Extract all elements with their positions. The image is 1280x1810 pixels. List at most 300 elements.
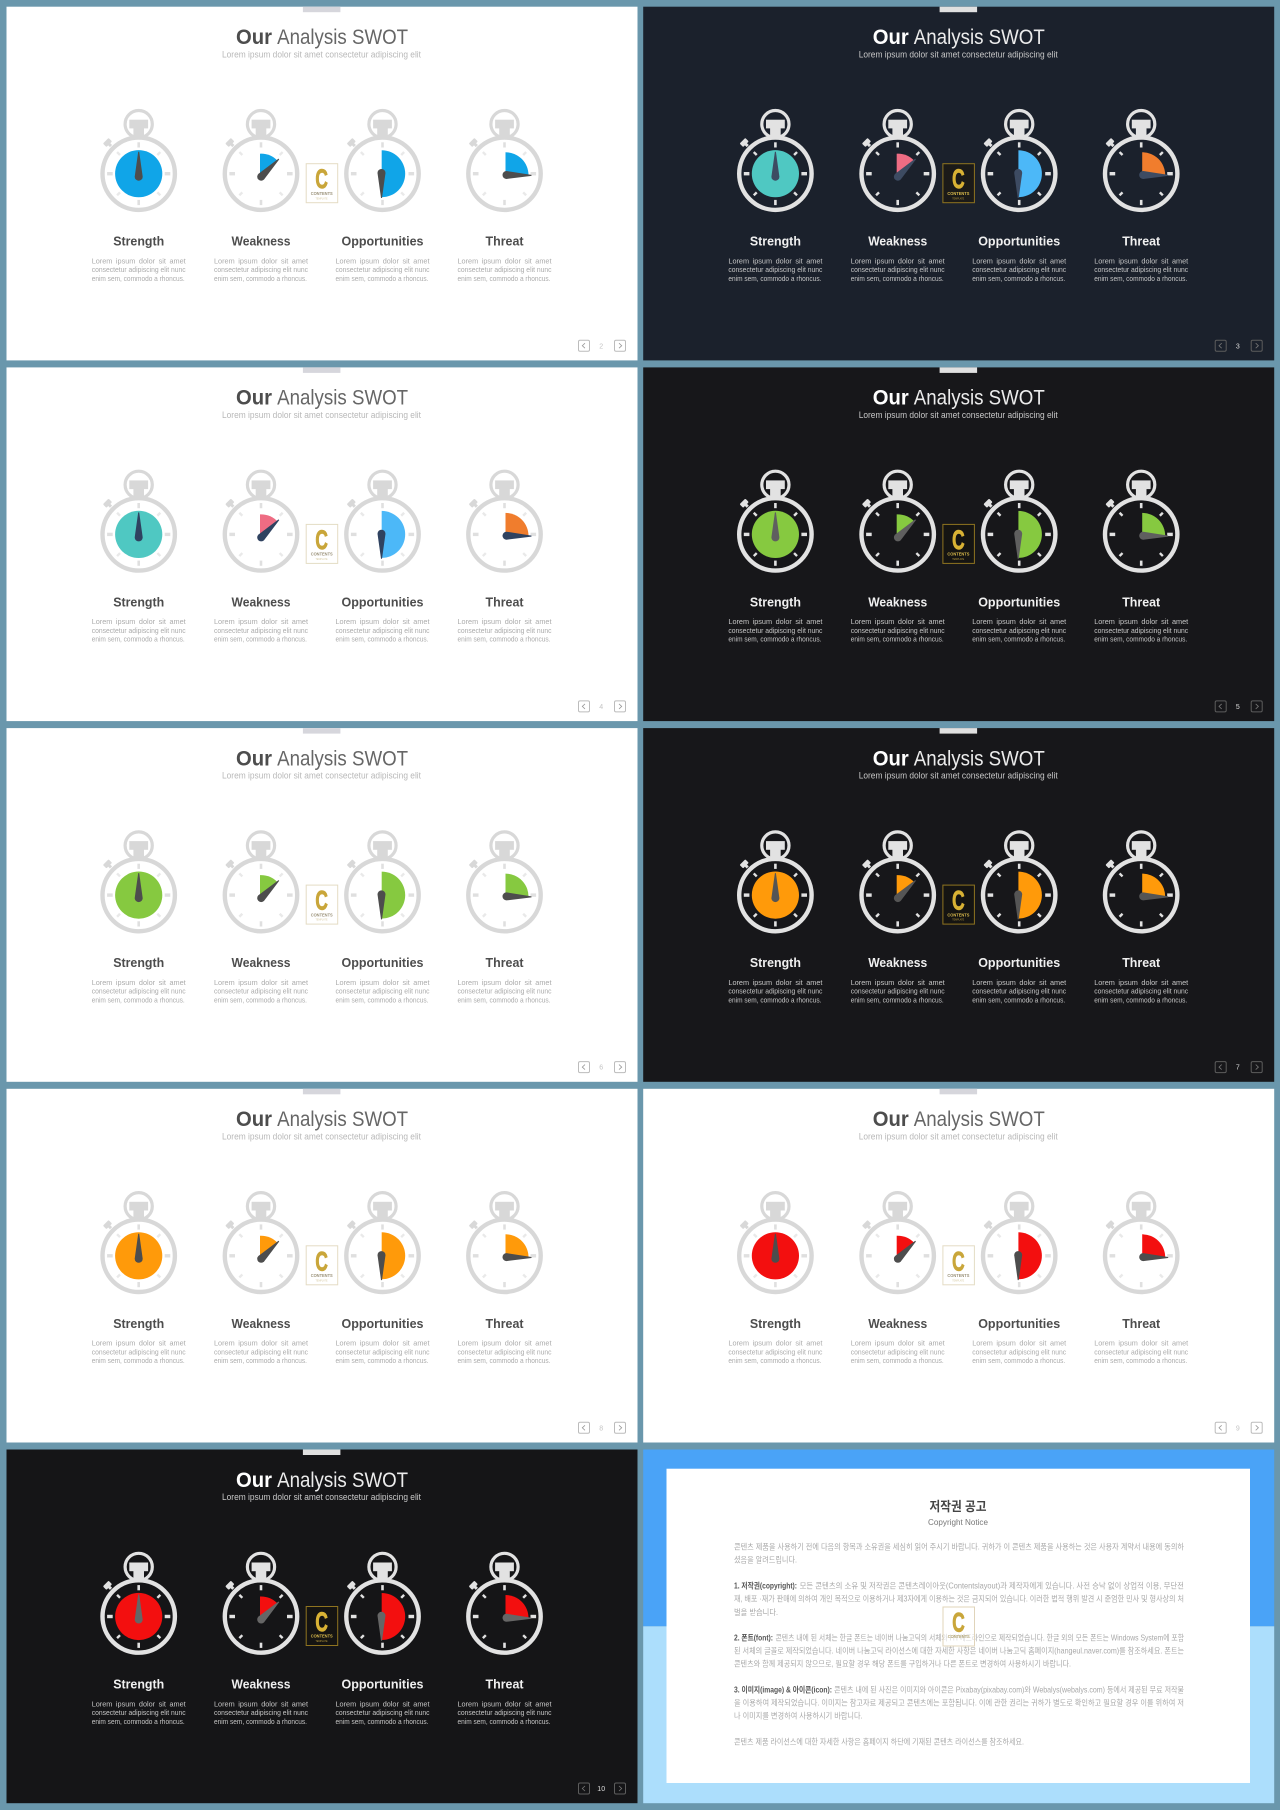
stopwatch: Threat: [1105, 1193, 1177, 1292]
title: Analysis SWOT: [914, 387, 1045, 410]
text: Threat: Lorem ipsum dolor sit amet: [458, 617, 552, 626]
text: Strength: Strength: [750, 595, 801, 609]
text: Strength: Strength: [113, 235, 164, 249]
text: Opportunities: consectetur adipiscing elit nunc: [972, 265, 1067, 274]
title: Our: [236, 387, 272, 410]
text: Opportunities: Lorem ipsum dolor sit amet: [972, 978, 1066, 987]
copyright section 1: 벌을 받습니다.: [734, 1607, 778, 1617]
text: Opportunities: enim sem, commodo a rhoncus.: [972, 635, 1065, 644]
text: Threat: Lorem ipsum dolor sit amet: [458, 1699, 552, 1708]
text: Opportunities: consectetur adipiscing elit nunc: [972, 626, 1067, 635]
text: Threat: [458, 595, 552, 644]
text: Opportunities: enim sem, commodo a rhoncus.: [336, 995, 429, 1004]
pager: [1215, 1062, 1262, 1073]
copyright section 1: [734, 1580, 1184, 1617]
text: Weakness: Weakness: [868, 235, 927, 249]
title: [236, 747, 408, 770]
logo: TEMPLATE: [952, 196, 964, 200]
stopwatch: Weakness: [862, 110, 934, 210]
text: Opportunities: Opportunities: [978, 1317, 1060, 1331]
logo: [306, 885, 338, 924]
pager: [578, 1422, 626, 1433]
stopwatch: Strength: [102, 471, 175, 571]
text: Opportunities: Opportunities: [342, 235, 424, 249]
text: Strength: Strength: [113, 956, 164, 970]
copyright section 1: 모든 콘텐츠의 소유 및 저작권은 콘텐츠레이아웃(Contentslayout)과 제작자에게 있습니다. 사전 승낙 없이 상업적 이용, 무단전: [800, 1580, 1184, 1590]
text: Opportunities: enim sem, commodo a rhoncus.: [336, 274, 429, 283]
text: Strength: consectetur adipiscing elit nunc: [92, 626, 186, 635]
logo: C: [315, 886, 328, 916]
copyright heading: [928, 1499, 988, 1527]
text: Threat: [458, 956, 552, 1004]
text: Threat: consectetur adipiscing elit nunc: [458, 1708, 552, 1717]
text: Opportunities: Lorem ipsum dolor sit amet: [972, 617, 1066, 626]
text: Threat: [1094, 235, 1189, 283]
logo: [943, 164, 974, 203]
stopwatch: Opportunities: [983, 110, 1055, 210]
logo: TEMPLATE: [316, 1639, 328, 1643]
title: Analysis SWOT: [277, 747, 408, 770]
text: Threat: enim sem, commodo a rhoncus.: [458, 635, 551, 644]
title: [873, 747, 1045, 770]
panel: slide 10 black red: [6, 1450, 638, 1803]
logo: C: [315, 1246, 328, 1276]
copyright section 3: 을 이용하여 제작되었습니다. 이미지는 참고자료 제공되고 콘텐츠에는 포함됩니다. 이에 관한 권리는 귀하가 별도로 확인하고 필요할 경우 이를 위하여 저: [734, 1697, 1184, 1707]
copyright closing line: 콘텐츠 제품 라이선스에 대한 자세한 사항은 홈페이지 하단에 기재된 콘텐츠 라이선스를 참조하세요.: [734, 1736, 1024, 1746]
text: Strength: Lorem ipsum dolor sit amet: [92, 617, 186, 626]
text: Opportunities: Lorem ipsum dolor sit amet: [336, 978, 430, 987]
subtitle: Lorem ipsum dolor sit amet consectetur adipiscing elit: [222, 410, 421, 420]
text: Threat: Lorem ipsum dolor sit amet: [458, 978, 552, 987]
text: Weakness: [214, 1317, 308, 1365]
logo: [306, 164, 338, 203]
logo: CONTENTS: [947, 912, 969, 917]
stopwatch: Opportunities: [346, 1193, 419, 1292]
subtitle: Lorem ipsum dolor sit amet consectetur adipiscing elit: [859, 771, 1058, 781]
text: Weakness: consectetur adipiscing elit nunc: [214, 1347, 308, 1356]
text: Opportunities: consectetur adipiscing elit nunc: [336, 626, 430, 635]
pager: 7: [1236, 1065, 1240, 1072]
pager: 9: [1236, 1425, 1240, 1432]
text: Opportunities: enim sem, commodo a rhoncus.: [972, 1356, 1065, 1365]
logo: CONTENTS: [311, 191, 333, 196]
text: Weakness: Weakness: [868, 595, 927, 609]
text: Opportunities: [972, 956, 1067, 1004]
text: Strength: Lorem ipsum dolor sit amet: [728, 256, 822, 265]
logo: TEMPLATE: [316, 918, 328, 922]
text: Strength: [92, 1678, 186, 1726]
text: Opportunities: Opportunities: [978, 956, 1060, 970]
text: Threat: consectetur adipiscing elit nunc: [458, 1347, 552, 1356]
stopwatch: Strength: [102, 1553, 175, 1653]
stopwatch: Weakness: [862, 1193, 934, 1292]
text: Weakness: consectetur adipiscing elit nunc: [851, 265, 945, 274]
text: Opportunities: enim sem, commodo a rhoncus.: [336, 1356, 429, 1365]
logo: [306, 1606, 338, 1646]
title: Our: [236, 1469, 272, 1492]
logo: CONTENTS: [948, 1634, 970, 1639]
text: Threat: consectetur adipiscing elit nunc: [1094, 1347, 1189, 1356]
stopwatch: Weakness: [225, 1193, 297, 1292]
text: Strength: Lorem ipsum dolor sit amet: [728, 1339, 822, 1348]
text: Strength: Strength: [113, 595, 164, 609]
text: Threat: enim sem, commodo a rhoncus.: [458, 1356, 551, 1365]
text: Strength: enim sem, commodo a rhoncus.: [728, 274, 821, 283]
pager: [578, 1062, 626, 1073]
title: Our: [236, 747, 272, 770]
text: Weakness: Lorem ipsum dolor sit amet: [851, 617, 945, 626]
text: Opportunities: enim sem, commodo a rhoncus.: [336, 1717, 429, 1726]
text: Strength: [92, 1317, 186, 1365]
text: Weakness: Lorem ipsum dolor sit amet: [214, 256, 308, 265]
stopwatch: Opportunities: [346, 471, 419, 571]
stopwatch: Threat: [1105, 110, 1177, 210]
stopwatch: Strength: [102, 832, 175, 931]
text: Strength: [92, 956, 186, 1004]
text: Opportunities: [336, 235, 430, 283]
text: Weakness: Weakness: [232, 956, 291, 970]
text: Weakness: [851, 1317, 945, 1365]
logo: TEMPLATE: [316, 1278, 328, 1282]
text: Threat: consectetur adipiscing elit nunc: [1094, 626, 1189, 635]
text: Strength: [92, 595, 186, 644]
text: Strength: Strength: [113, 1678, 164, 1692]
logo: TEMPLATE: [952, 557, 964, 561]
stopwatch: Threat: [1105, 471, 1177, 571]
text: Weakness: enim sem, commodo a rhoncus.: [851, 274, 944, 283]
text: Weakness: enim sem, commodo a rhoncus.: [851, 635, 944, 644]
logo: [306, 524, 338, 563]
text: Strength: enim sem, commodo a rhoncus.: [728, 635, 821, 644]
title: Our: [873, 747, 909, 770]
logo: CONTENTS: [947, 552, 969, 557]
text: Threat: consectetur adipiscing elit nunc: [1094, 265, 1189, 274]
text: Strength: Lorem ipsum dolor sit amet: [92, 1339, 186, 1348]
title: [236, 1469, 408, 1492]
copyright section 3: 나 이미지를 변경하여 사용하시기 바랍니다.: [734, 1710, 863, 1720]
text: Opportunities: enim sem, commodo a rhoncus.: [336, 635, 429, 644]
subtitle: Lorem ipsum dolor sit amet consectetur adipiscing elit: [859, 49, 1058, 59]
title: Our: [873, 1108, 909, 1131]
title: Analysis SWOT: [277, 387, 408, 410]
text: Threat: Threat: [1122, 956, 1161, 970]
logo: TEMPLATE: [316, 196, 328, 200]
title: [873, 26, 1045, 49]
pager: [1215, 340, 1262, 351]
text: Opportunities: Lorem ipsum dolor sit amet: [336, 256, 430, 265]
text: Threat: Lorem ipsum dolor sit amet: [1094, 978, 1188, 987]
text: Weakness: [214, 235, 308, 283]
stopwatch: Strength: [739, 832, 812, 931]
stopwatch: Weakness: [862, 471, 934, 571]
text: Strength: enim sem, commodo a rhoncus.: [92, 1717, 185, 1726]
logo: CONTENTS: [311, 912, 333, 917]
text: Strength: Strength: [113, 1317, 164, 1331]
stopwatch: Opportunities: [346, 832, 419, 931]
title: Analysis SWOT: [914, 1108, 1045, 1131]
logo: CONTENTS: [311, 1634, 333, 1639]
stopwatch: Threat: [468, 471, 541, 571]
text: Strength: [728, 1317, 823, 1365]
text: Weakness: Lorem ipsum dolor sit amet: [214, 1699, 308, 1708]
logo: C: [315, 525, 328, 555]
text: Opportunities: consectetur adipiscing elit nunc: [336, 265, 430, 274]
text: Threat: [1094, 595, 1189, 644]
title: [873, 387, 1045, 410]
stopwatch: Weakness: [225, 1553, 297, 1653]
text: Opportunities: enim sem, commodo a rhoncus.: [972, 995, 1065, 1004]
copyright intro: [734, 1542, 1184, 1564]
text: Threat: consectetur adipiscing elit nunc: [458, 626, 552, 635]
stopwatch: Weakness: [225, 832, 297, 931]
copyright section 2: 된 서체의 글꼴로 제작되었습니다. 네이버 나눔고딕 라이선스에 대한 자세한 사항은 네이버 나눔고딕 홈페이지(hangeul.naver.com)를 참조하세요. 폰트는: [734, 1646, 1184, 1656]
panel: slide 8 white orange: [6, 1089, 638, 1442]
text: Strength: consectetur adipiscing elit nunc: [92, 1708, 186, 1717]
subtitle: Lorem ipsum dolor sit amet consectetur adipiscing elit: [222, 49, 421, 59]
title: Our: [873, 387, 909, 410]
text: Threat: [1094, 1317, 1189, 1365]
text: Opportunities: Opportunities: [342, 595, 424, 609]
logo: [943, 524, 974, 563]
logo: C: [952, 1608, 965, 1638]
text: Threat: enim sem, commodo a rhoncus.: [1094, 995, 1187, 1004]
text: Strength: Strength: [750, 956, 801, 970]
text: Opportunities: Opportunities: [342, 956, 424, 970]
panel: slide 4 white multicolour: [6, 367, 638, 721]
text: Weakness: [851, 235, 945, 283]
copyright section 3: [734, 1684, 1184, 1720]
pager: [578, 701, 626, 712]
text: Opportunities: Lorem ipsum dolor sit amet: [972, 1339, 1066, 1348]
text: Strength: Lorem ipsum dolor sit amet: [92, 978, 186, 987]
text: Weakness: Lorem ipsum dolor sit amet: [851, 978, 945, 987]
panel: slide 5 black green: [643, 367, 1274, 721]
text: Opportunities: Lorem ipsum dolor sit amet: [336, 617, 430, 626]
stopwatch: Weakness: [862, 832, 934, 931]
logo: [943, 885, 974, 924]
text: Strength: Lorem ipsum dolor sit amet: [92, 1699, 186, 1708]
text: Weakness: Weakness: [232, 1678, 291, 1692]
text: Opportunities: consectetur adipiscing elit nunc: [336, 1347, 430, 1356]
logo: [306, 1246, 338, 1285]
pager: 2: [599, 343, 603, 350]
text: Weakness: enim sem, commodo a rhoncus.: [214, 274, 307, 283]
stopwatch: Opportunities: [346, 110, 419, 210]
text: Weakness: consectetur adipiscing elit nunc: [214, 1708, 308, 1717]
pager: 4: [599, 704, 603, 711]
pager: [1215, 701, 1262, 712]
panel: slide 6 white green: [6, 728, 638, 1082]
text: Threat: Threat: [486, 1317, 524, 1331]
text: Weakness: consectetur adipiscing elit nunc: [214, 265, 308, 274]
copyright section 1: 재, 배포 ·재가 판매에 의하여 개인 목적으로 이용하거나 제3자에게 이용하는 것은 금지되어 있습니다. 이러한 법적 행위 발견 시 준엄한 민사 및 형사상의 처: [734, 1593, 1184, 1603]
stopwatch: Weakness: [225, 471, 297, 571]
text: Weakness: Lorem ipsum dolor sit amet: [214, 978, 308, 987]
text: Strength: consectetur adipiscing elit nunc: [92, 987, 186, 996]
text: Opportunities: consectetur adipiscing elit nunc: [972, 987, 1067, 996]
text: Opportunities: Lorem ipsum dolor sit amet: [336, 1339, 430, 1348]
title: Analysis SWOT: [914, 747, 1045, 770]
text: Threat: [1094, 956, 1189, 1004]
text: Strength: Lorem ipsum dolor sit amet: [728, 617, 822, 626]
text: Weakness: Lorem ipsum dolor sit amet: [214, 617, 308, 626]
text: Strength: [728, 595, 823, 644]
text: Opportunities: consectetur adipiscing elit nunc: [972, 1347, 1067, 1356]
text: Weakness: Weakness: [232, 235, 291, 249]
text: Strength: [92, 235, 186, 283]
text: Strength: Strength: [750, 235, 801, 249]
text: Weakness: Lorem ipsum dolor sit amet: [851, 1339, 945, 1348]
text: Threat: enim sem, commodo a rhoncus.: [1094, 635, 1187, 644]
text: Threat: enim sem, commodo a rhoncus.: [458, 995, 551, 1004]
title: Analysis SWOT: [277, 1108, 408, 1131]
title: Analysis SWOT: [277, 1469, 408, 1492]
text: Threat: enim sem, commodo a rhoncus.: [458, 274, 551, 283]
text: Opportunities: Opportunities: [978, 235, 1060, 249]
text: Threat: Threat: [486, 595, 524, 609]
panel: slide 2 white blue: [6, 7, 638, 360]
title: [236, 26, 408, 49]
text: Strength: Lorem ipsum dolor sit amet: [92, 256, 186, 265]
copyright intro: 셨음을 알려드립니다.: [734, 1554, 797, 1564]
text: Weakness: enim sem, commodo a rhoncus.: [851, 995, 944, 1004]
title: [236, 387, 408, 410]
logo: C: [315, 164, 328, 194]
text: Opportunities: Opportunities: [342, 1317, 424, 1331]
copyright section 2: 콘텐츠와 함께 제공되지 않으므로, 필요할 경우 해당 폰트를 구입하거나 다른 폰트로 변경하여 사용하시기 바랍니다.: [734, 1658, 1071, 1668]
text: Strength: consectetur adipiscing elit nunc: [728, 987, 823, 996]
text: Threat: [458, 235, 552, 283]
text: Strength: consectetur adipiscing elit nunc: [728, 626, 823, 635]
text: Weakness: Weakness: [232, 1317, 291, 1331]
text: Threat: Lorem ipsum dolor sit amet: [1094, 256, 1188, 265]
logo: [943, 1607, 974, 1646]
text: Weakness: enim sem, commodo a rhoncus.: [214, 1717, 307, 1726]
text: Threat: Threat: [486, 1678, 524, 1692]
title: Analysis SWOT: [277, 26, 408, 49]
text: Weakness: Lorem ipsum dolor sit amet: [214, 1339, 308, 1348]
pager: [1215, 1422, 1262, 1433]
stopwatch: Opportunities: [346, 1553, 419, 1653]
text: Weakness: [851, 595, 945, 644]
logo: [943, 1246, 974, 1285]
stopwatch: Strength: [739, 471, 812, 571]
text: Threat: Lorem ipsum dolor sit amet: [458, 256, 552, 265]
panel: slide 9 white red: [643, 1089, 1274, 1442]
text: Opportunities: Lorem ipsum dolor sit amet: [336, 1699, 430, 1708]
text: Opportunities: consectetur adipiscing elit nunc: [336, 1708, 430, 1717]
logo: C: [952, 886, 965, 916]
logo: CONTENTS: [311, 1273, 333, 1278]
title: Analysis SWOT: [914, 26, 1045, 49]
text: Opportunities: [972, 595, 1067, 644]
text: Threat: Threat: [486, 235, 524, 249]
text: Threat: consectetur adipiscing elit nunc: [1094, 987, 1189, 996]
text: Threat: Lorem ipsum dolor sit amet: [1094, 617, 1188, 626]
text: Opportunities: [336, 1317, 430, 1365]
text: Threat: enim sem, commodo a rhoncus.: [458, 1717, 551, 1726]
text: Weakness: [214, 595, 308, 644]
copyright intro: 콘텐츠 제품을 사용하기 전에 다음의 항목과 소유권을 세심히 읽어 주시기 바랍니다. 귀하가 이 콘텐츠 제품을 사용하는 것은 사용자 계약서 내용에 동의하: [734, 1542, 1184, 1552]
copyright section 3: 3. 이미지(image) & 아이콘(icon):: [734, 1684, 832, 1694]
text: Strength: enim sem, commodo a rhoncus.: [728, 1356, 821, 1365]
text: Strength: consectetur adipiscing elit nunc: [728, 265, 823, 274]
text: Opportunities: Opportunities: [978, 595, 1060, 609]
logo: C: [952, 164, 965, 194]
text: Weakness: consectetur adipiscing elit nunc: [851, 987, 945, 996]
logo: TEMPLATE: [316, 557, 328, 561]
text: Weakness: Weakness: [868, 1317, 927, 1331]
subtitle: Lorem ipsum dolor sit amet consectetur adipiscing elit: [859, 1131, 1058, 1141]
text: Strength: enim sem, commodo a rhoncus.: [728, 995, 821, 1004]
text: Threat: enim sem, commodo a rhoncus.: [1094, 274, 1187, 283]
logo: CONTENTS: [311, 552, 333, 557]
title: Our: [873, 26, 909, 49]
text: Threat: Lorem ipsum dolor sit amet: [458, 1339, 552, 1348]
text: Weakness: consectetur adipiscing elit nunc: [851, 1347, 945, 1356]
title: Our: [236, 1108, 272, 1131]
stopwatch: Strength: [739, 110, 812, 210]
copyright heading: 저작권 공고: [930, 1499, 987, 1514]
text: Threat: consectetur adipiscing elit nunc: [458, 987, 552, 996]
text: Opportunities: [336, 595, 430, 644]
text: Weakness: Lorem ipsum dolor sit amet: [851, 256, 945, 265]
logo: CONTENTS: [947, 1273, 969, 1278]
text: Threat: Threat: [1122, 1317, 1161, 1331]
pager: [578, 1783, 626, 1794]
panel: copyright notice: [643, 1450, 1274, 1803]
text: Opportunities: enim sem, commodo a rhoncus.: [972, 274, 1065, 283]
text: Threat: [458, 1317, 552, 1365]
text: Opportunities: [972, 1317, 1067, 1365]
text: Weakness: enim sem, commodo a rhoncus.: [214, 995, 307, 1004]
text: Strength: consectetur adipiscing elit nunc: [92, 1347, 186, 1356]
text: Threat: Threat: [1122, 235, 1161, 249]
subtitle: Lorem ipsum dolor sit amet consectetur adipiscing elit: [859, 410, 1058, 420]
text: Weakness: [214, 1678, 308, 1726]
stopwatch: Strength: [102, 1193, 175, 1292]
subtitle: Lorem ipsum dolor sit amet consectetur adipiscing elit: [222, 771, 421, 781]
text: Weakness: [214, 956, 308, 1004]
text: Threat: Lorem ipsum dolor sit amet: [1094, 1339, 1188, 1348]
text: Strength: consectetur adipiscing elit nunc: [92, 265, 186, 274]
pager: 5: [1236, 704, 1240, 711]
text: Strength: enim sem, commodo a rhoncus.: [92, 274, 185, 283]
copyright section 2: 2. 폰트(font):: [734, 1634, 773, 1642]
text: Opportunities: [972, 235, 1067, 283]
text: Opportunities: consectetur adipiscing elit nunc: [336, 987, 430, 996]
text: Strength: enim sem, commodo a rhoncus.: [92, 635, 185, 644]
panel: slide 7 black orange: [643, 728, 1274, 1082]
text: Strength: [728, 235, 823, 283]
text: Threat: Threat: [1122, 595, 1161, 609]
text: Weakness: Weakness: [868, 956, 927, 970]
stopwatch: Threat: [468, 1553, 541, 1653]
text: Weakness: consectetur adipiscing elit nunc: [214, 987, 308, 996]
text: Opportunities: [336, 1678, 430, 1726]
stopwatch: Threat: [1105, 832, 1177, 931]
text: Weakness: enim sem, commodo a rhoncus.: [214, 1356, 307, 1365]
stopwatch: Opportunities: [983, 832, 1055, 931]
stopwatch: Opportunities: [983, 471, 1055, 571]
text: Strength: [728, 956, 823, 1004]
title: Our: [236, 26, 272, 49]
text: Threat: Threat: [486, 956, 524, 970]
stopwatch: Strength: [102, 110, 175, 210]
text: Opportunities: [336, 956, 430, 1004]
text: Strength: consectetur adipiscing elit nunc: [728, 1347, 823, 1356]
text: Weakness: consectetur adipiscing elit nunc: [851, 626, 945, 635]
